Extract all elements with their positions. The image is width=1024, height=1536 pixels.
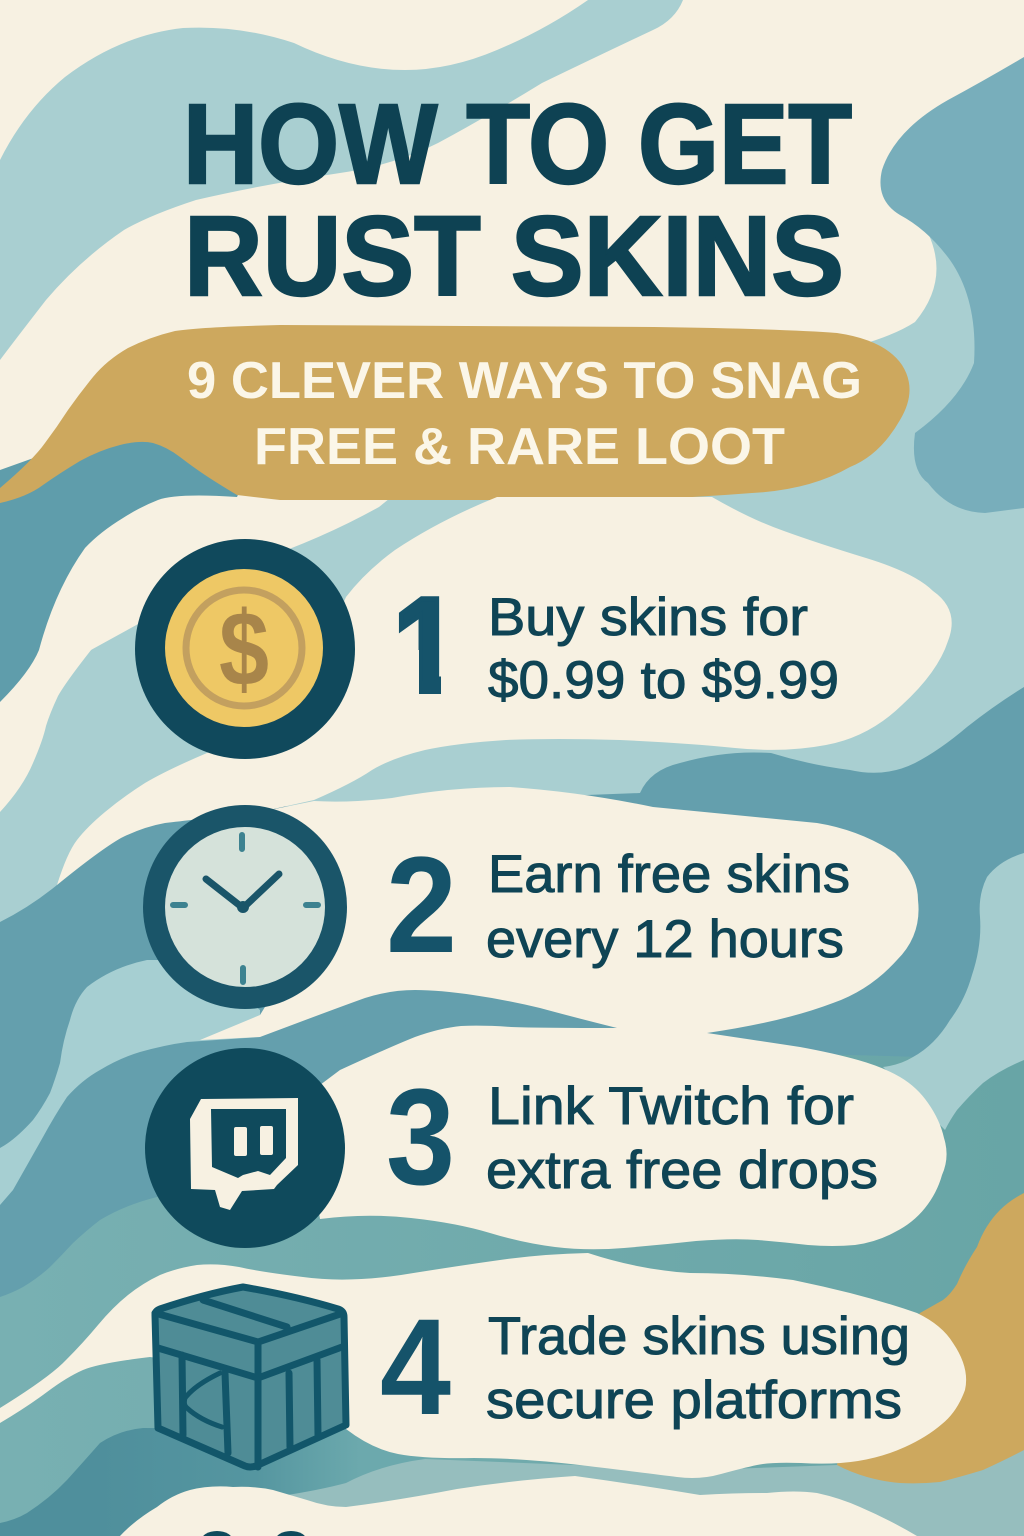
step 4 text: secure platforms — [486, 1371, 902, 1430]
step 3 text: Link Twitch for — [488, 1077, 854, 1136]
step number 1: 1 — [393, 570, 459, 723]
icon: twitch badge — [145, 1048, 345, 1248]
step 2: earn free skins — [143, 805, 850, 1009]
step 1: buy skins — [135, 539, 839, 759]
step 1 text — [488, 588, 839, 710]
step number 4: 4 — [380, 1291, 451, 1444]
subtitle: 9 CLEVER WAYS TO SNAG — [187, 352, 862, 410]
step 2 text — [486, 845, 850, 969]
title: HOW TO GET — [183, 81, 852, 207]
step number 3: 3 — [386, 1061, 455, 1214]
step 3: link twitch — [145, 1048, 878, 1248]
step 2 text: Earn free skins — [488, 845, 850, 904]
panel: gold subtitle banner — [0, 325, 910, 503]
subtitle: FREE & RARE LOOT — [254, 418, 785, 476]
icon: cropped tops of next step icon — [201, 1531, 307, 1536]
step 1 text: $0.99 to $9.99 — [488, 651, 839, 710]
icon: clock — [143, 805, 347, 1009]
step 3 text — [486, 1077, 878, 1200]
step 1 text: Buy skins for — [488, 588, 808, 647]
panel: step 1 blob — [57, 497, 952, 885]
icon: gold dollar coin: $ — [219, 590, 269, 708]
panel: step 4 blob — [0, 1253, 966, 1478]
title — [183, 81, 852, 319]
step 3 text: extra free drops — [486, 1141, 878, 1200]
panel: step 2 blob — [200, 787, 919, 1060]
subtitle — [187, 352, 862, 476]
step 2 text: every 12 hours — [486, 910, 844, 969]
title: RUST SKINS — [184, 193, 844, 319]
step 4 text: Trade skins using — [488, 1307, 910, 1366]
panel: step 5 blob, cropped at the bottom edge — [120, 1476, 917, 1536]
panel: step 3 blob — [300, 1010, 947, 1249]
step 4 text — [486, 1307, 910, 1430]
icon: crate — [155, 1287, 346, 1467]
step 4: trade skins — [155, 1287, 910, 1467]
step number 2: 2 — [386, 829, 457, 982]
icon: gold dollar coin — [135, 539, 355, 759]
